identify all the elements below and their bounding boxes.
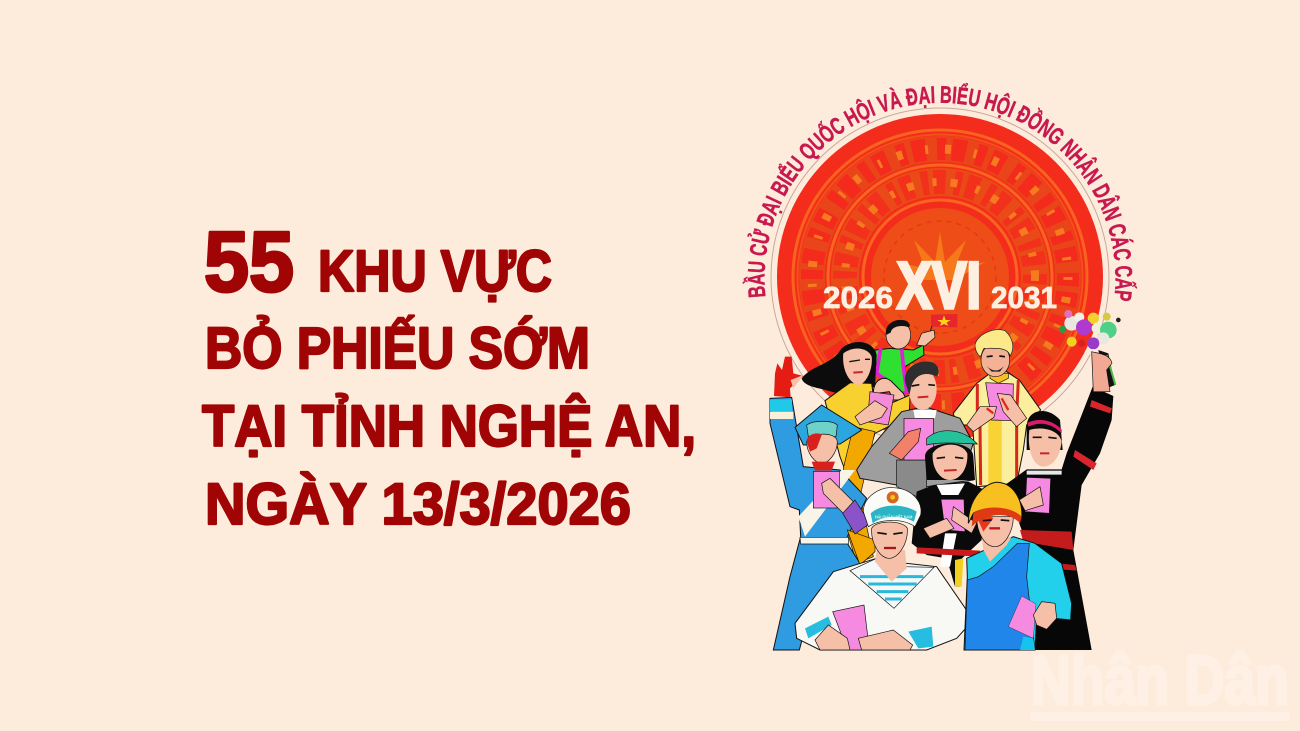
flag xyxy=(929,314,957,334)
term label: XVI xyxy=(897,248,981,322)
man in grey suit xyxy=(857,362,973,498)
sailor xyxy=(795,488,973,650)
woman with headband raising bouquet xyxy=(1005,352,1113,650)
arc text: BẦU CỬ ĐẠI BIỂU QUỐC HỘI VÀ ĐẠI BIỂU HỘI ĐỒNG NHÂN DÂN CÁC CẤP xyxy=(742,82,1138,302)
baby xyxy=(873,320,935,400)
title: TẠI TỈNH NGHỆ AN, xyxy=(202,394,696,459)
election emblem xyxy=(742,82,1138,650)
bouquet xyxy=(1059,310,1121,388)
woman with green hat xyxy=(912,431,982,587)
woman in blue with raised arm xyxy=(770,357,875,650)
voters illustration xyxy=(770,310,1121,650)
title xyxy=(202,215,696,537)
term label xyxy=(823,248,1057,322)
title: BỎ PHIẾU SỚM xyxy=(205,316,590,381)
sailor: HẢI QUÂN VIỆT NAM xyxy=(875,512,912,520)
title: KHU VỰC xyxy=(318,239,552,304)
title: NGÀY 13/3/2026 xyxy=(205,472,631,537)
worker with helmet xyxy=(964,482,1072,650)
man with turban xyxy=(953,330,1041,487)
term label: 2031 xyxy=(991,280,1057,315)
title: 55 xyxy=(204,215,294,310)
term label: 2026 xyxy=(823,280,893,315)
mother xyxy=(802,342,910,563)
bronze drum xyxy=(771,108,1109,446)
